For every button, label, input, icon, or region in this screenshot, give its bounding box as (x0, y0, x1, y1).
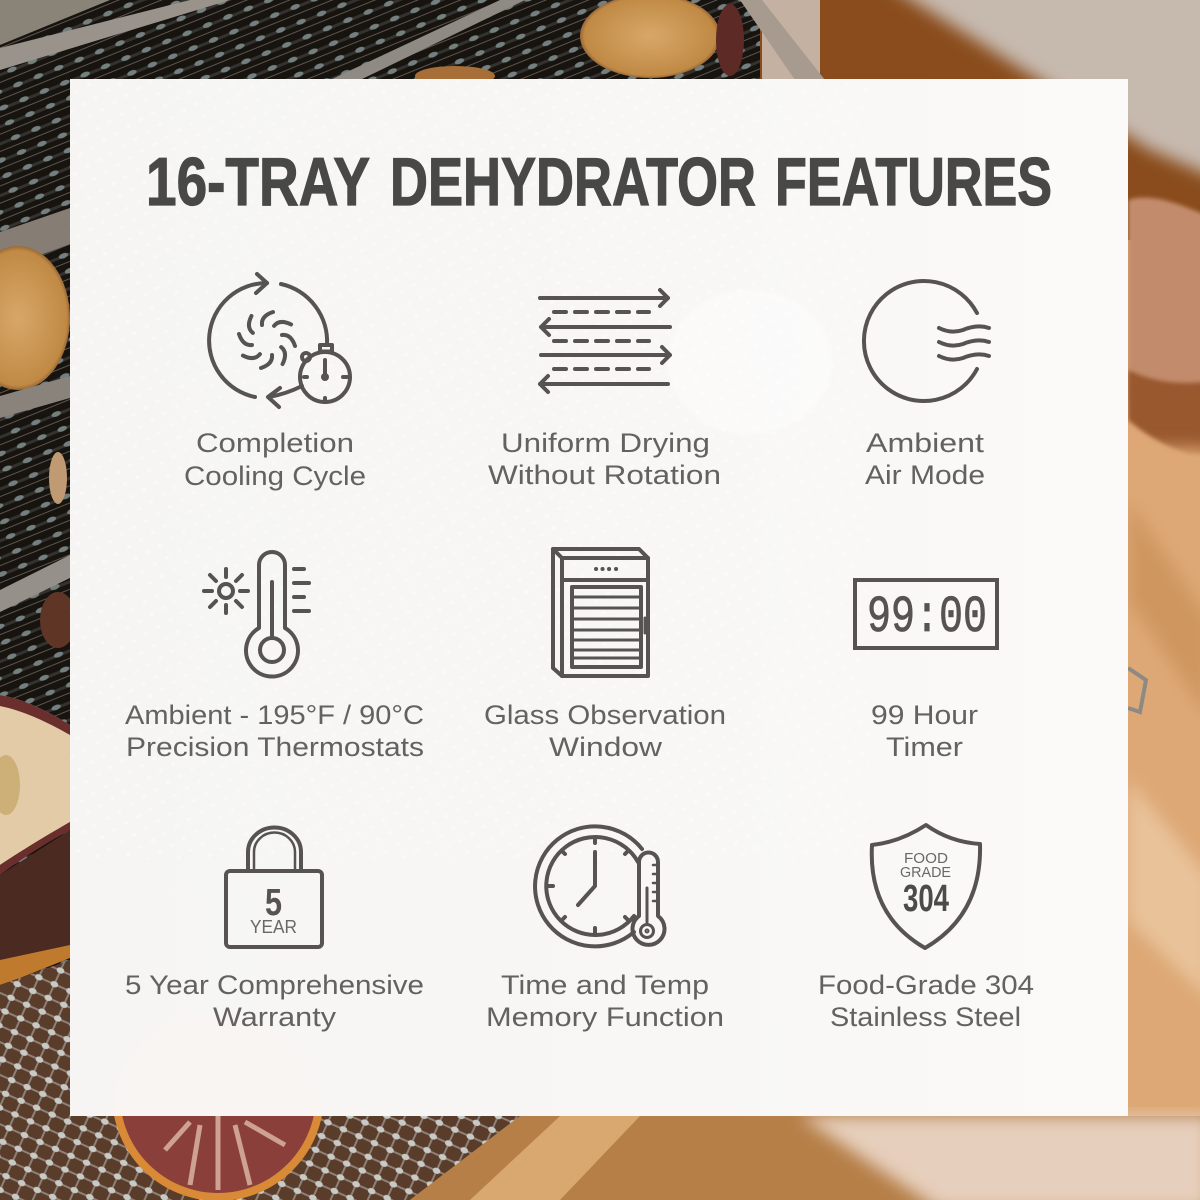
label: Stainless Steel (830, 1002, 1021, 1032)
wood table, bottom (410, 1116, 1200, 1200)
label: 99 Hour (871, 700, 978, 730)
label: Precision Thermostats (126, 732, 424, 762)
icon: thermometer and sun (204, 552, 309, 677)
label: Window (549, 732, 663, 762)
feature: 5 Year Warranty (125, 828, 424, 1032)
label: Air Mode (865, 460, 985, 490)
label: Warranty (213, 1002, 337, 1032)
icon: padlock warranty (226, 828, 322, 947)
icon: circle with air waves (864, 281, 989, 401)
hand, right side (1128, 198, 1200, 455)
icon: padlock warranty: YEAR (250, 917, 297, 937)
label: Cooling Cycle (184, 461, 366, 491)
trays and dried fruit, left strip (0, 80, 76, 990)
label: 5 Year Comprehensive (125, 970, 424, 1000)
title: FEATURES (775, 144, 1052, 220)
icon: digital timer (855, 580, 997, 648)
translucent white panel (70, 79, 1128, 1116)
feature: Uniform Drying (488, 290, 721, 490)
feature: 99 Hour Timer (855, 580, 997, 762)
wall and table edge, top right (760, 0, 1200, 240)
feature: Completion Cooling Cycle (184, 274, 366, 491)
icon: food grade shield: 304 (903, 878, 949, 920)
feature: Time and Temp Memory (486, 826, 724, 1032)
label: Ambient (866, 428, 985, 458)
icon: food grade shield: GRADE (900, 864, 951, 881)
label: Completion (196, 428, 354, 458)
icon: digital timer: 99:00 (867, 588, 987, 647)
feature: Glass Observation Window (484, 549, 726, 762)
label: Time and Temp (501, 970, 709, 1000)
label: Memory Function (486, 1002, 724, 1032)
trays, top (0, 0, 825, 86)
feature: Ambient Air Mode (864, 281, 989, 490)
icon: dehydrator cabinet (553, 549, 648, 676)
feature: Precision Thermostats (125, 552, 424, 762)
label: Glass Observation (484, 700, 726, 730)
icon: airflow arrows (540, 290, 670, 392)
icon: padlock warranty: 5 (265, 882, 282, 924)
tray mesh, bottom left (0, 960, 520, 1200)
dried orange slice (112, 989, 324, 1200)
label: Food-Grade 304 (818, 970, 1034, 1000)
icon: clock with thermometer (535, 826, 664, 946)
icon: food grade shield: FOOD (904, 850, 948, 867)
title: DEHYDRATOR (390, 144, 756, 220)
label: Uniform Drying (501, 428, 710, 458)
icon: food grade shield (872, 825, 980, 948)
feature: Food-Grade 304 (818, 825, 1034, 1032)
label: Without Rotation (488, 460, 721, 490)
label: Timer (886, 732, 963, 762)
wood table, right side (1120, 448, 1200, 1148)
icon: cooling cycle with stopwatch (209, 274, 350, 407)
label: Ambient - 195°F / 90°C (125, 700, 424, 730)
title: 16-TRAY (146, 144, 370, 220)
